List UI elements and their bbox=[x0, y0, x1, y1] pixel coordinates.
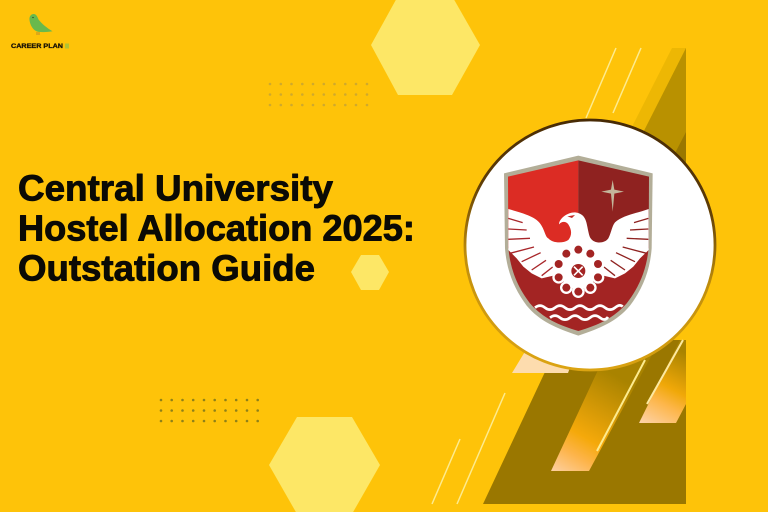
waves bbox=[535, 305, 623, 320]
eagle bbox=[508, 209, 649, 282]
decorative shapes: top right bbox=[605, 48, 686, 180]
title: Hostel Allocation 2025: bbox=[18, 208, 415, 248]
shield left red bbox=[508, 160, 578, 248]
shield right dark red bbox=[578, 160, 649, 248]
right wing feathers bbox=[604, 218, 648, 276]
shield outline bbox=[504, 156, 653, 336]
circle border bbox=[465, 120, 715, 370]
decorative lines: bottom bbox=[432, 340, 683, 504]
title bbox=[18, 168, 415, 288]
star bbox=[601, 180, 624, 212]
decorative lines: top bbox=[586, 48, 641, 118]
hexagon: bottom bbox=[269, 417, 380, 512]
logo: career plan b bbox=[11, 14, 69, 50]
logo circle bbox=[465, 120, 715, 370]
dot grid: top bbox=[269, 83, 368, 106]
logo text: CAREER PLAN bbox=[11, 43, 63, 50]
wheel lobes bbox=[552, 244, 604, 298]
university shield bbox=[504, 156, 653, 336]
decorative shapes: bottom right bbox=[483, 340, 686, 504]
logo mark bbox=[65, 44, 69, 48]
icon: green bird bbox=[29, 14, 52, 35]
title: Central University bbox=[18, 168, 333, 208]
dot grid: bottom bbox=[160, 399, 259, 422]
wheel emblem bbox=[552, 244, 604, 298]
eagle eye detail bbox=[567, 215, 575, 218]
left wing feathers bbox=[508, 218, 553, 276]
title: Outstation Guide bbox=[18, 248, 315, 288]
wheel dots bbox=[555, 246, 602, 296]
hexagon: middle bbox=[351, 255, 389, 290]
hexagon: top bbox=[371, 0, 480, 95]
lower shield band bbox=[508, 247, 649, 331]
